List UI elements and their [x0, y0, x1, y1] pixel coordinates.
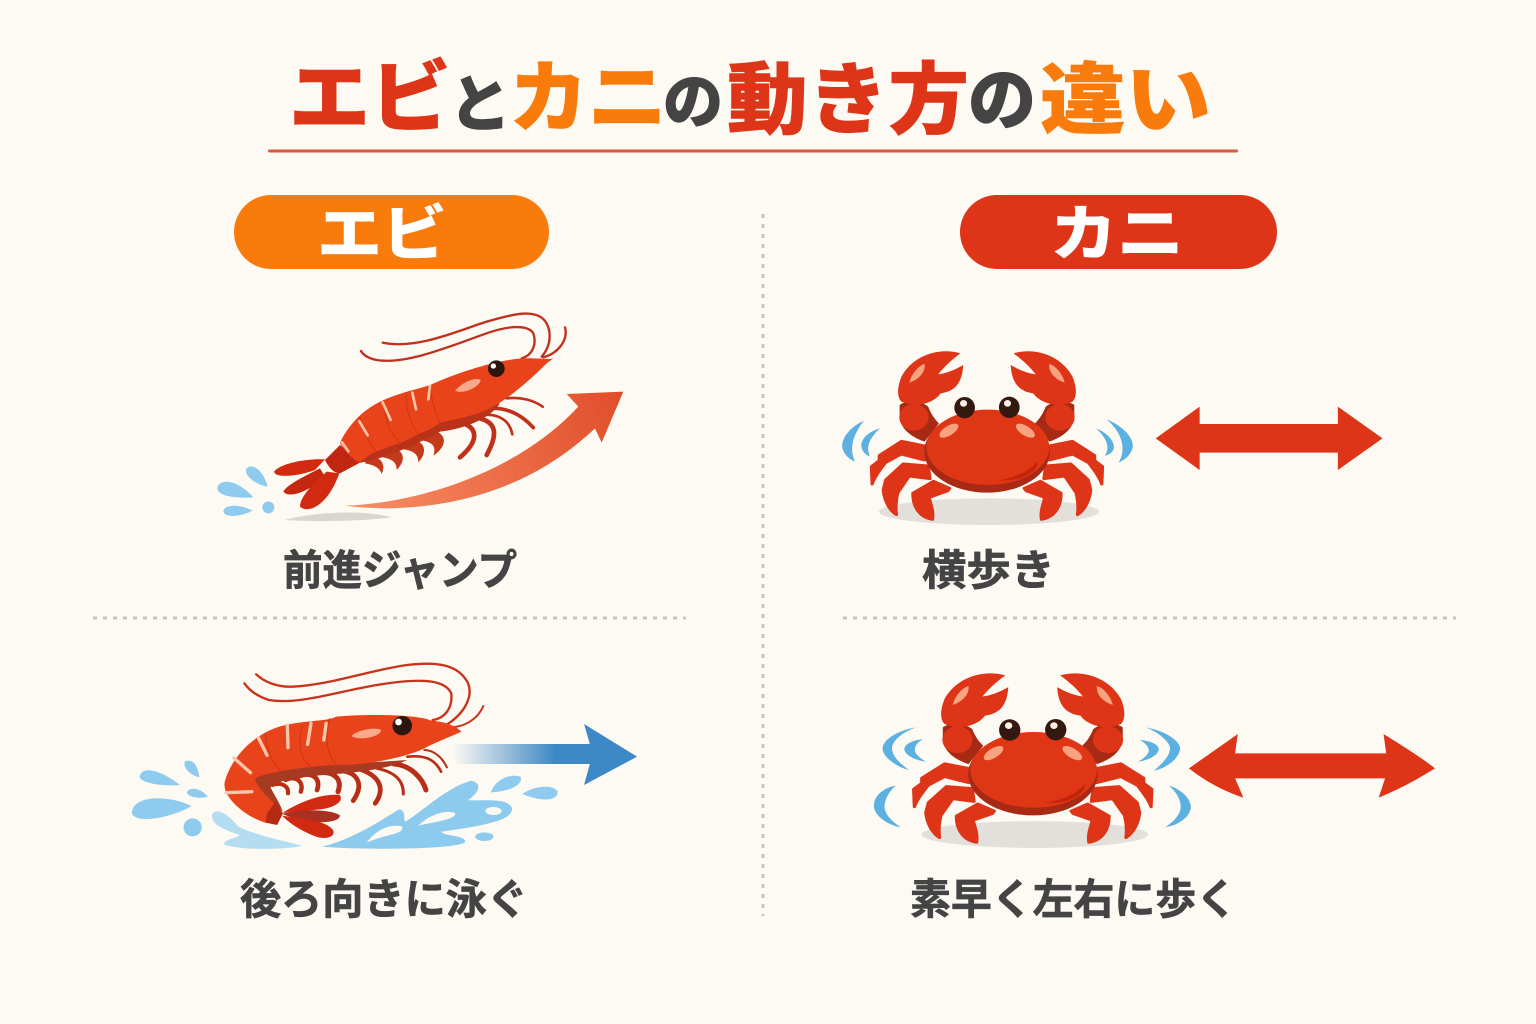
title: 動き方: [727, 56, 969, 144]
title: の: [663, 69, 723, 136]
illustration: shrimp swimming backward: [132, 664, 637, 849]
illustration: crab walking quickly: [874, 673, 1191, 848]
heading pill: エビ: エビ: [317, 201, 447, 268]
title: [289, 54, 1211, 144]
title: 違い: [1040, 56, 1211, 144]
caption: swim backward: 後ろ向きに泳ぐ: [240, 876, 528, 923]
illustration: shrimp jumping forward: [217, 314, 623, 521]
title: カニ: [509, 54, 667, 142]
arrow: fast left-right: [1189, 734, 1435, 798]
title: の: [968, 63, 1036, 139]
caption: forward jump: 前進ジャンプ: [283, 547, 517, 594]
caption: quick left and right walk: 素早く左右に歩く: [910, 876, 1237, 923]
title: エビ: [289, 54, 451, 142]
caption: sideways walk: 横歩き: [922, 547, 1055, 594]
title: と: [449, 71, 511, 140]
heading pill: カニ: [960, 195, 1277, 269]
title underline: [268, 150, 1238, 152]
illustration: crab walking sideways: [842, 351, 1133, 525]
heading pill: エビ: [234, 195, 549, 269]
heading pill: カニ: カニ: [1050, 201, 1184, 268]
arrow: left-right sideways: [1156, 407, 1382, 470]
